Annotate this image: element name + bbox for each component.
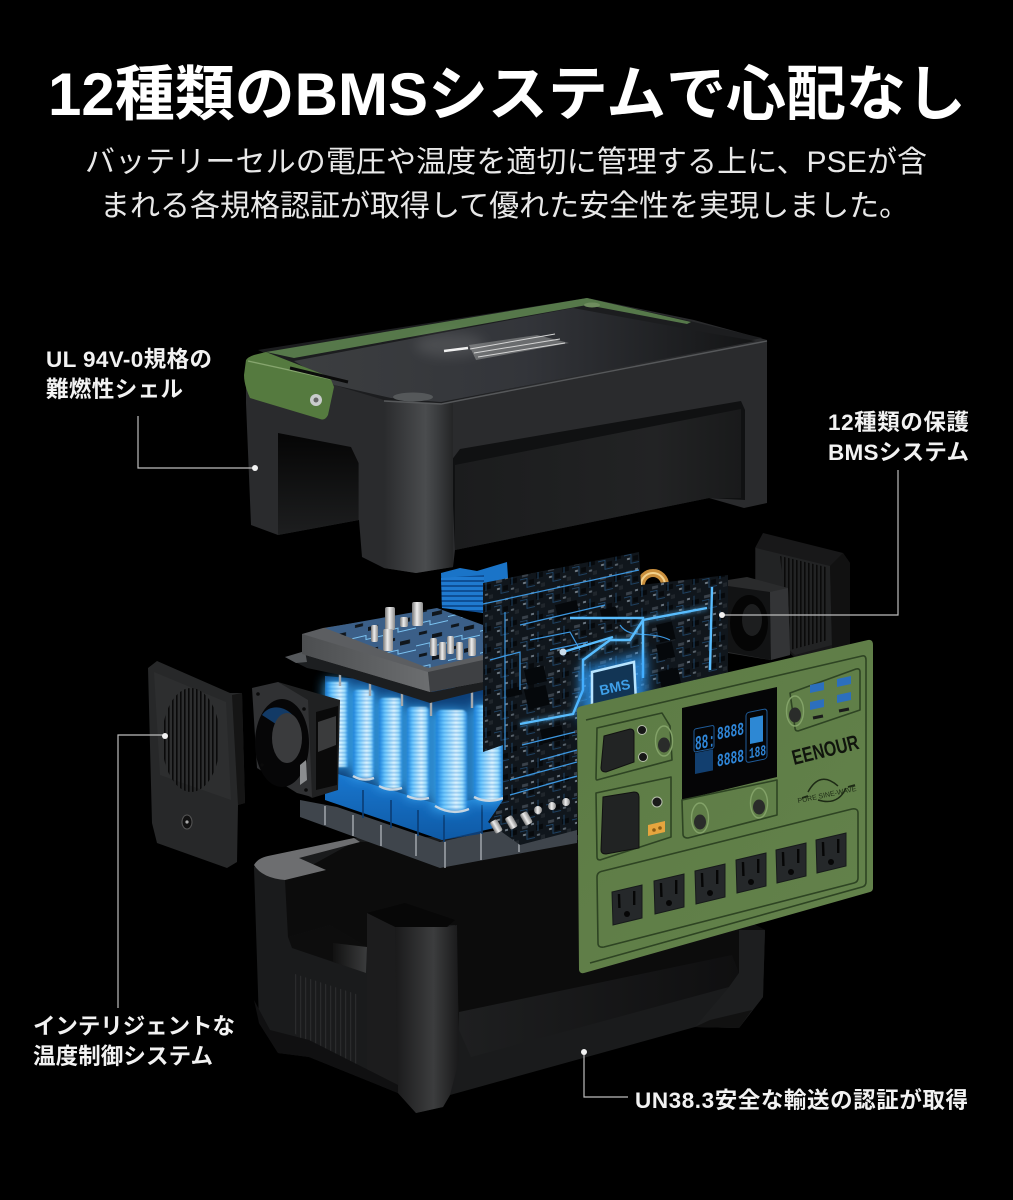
illustration: battery cells xyxy=(325,672,503,842)
panel: lower left socket group xyxy=(596,777,671,860)
callout: flame-retardant shell: 難燃性シェル xyxy=(46,377,183,402)
illustration: left fan xyxy=(252,682,340,798)
illustration: toroid coil xyxy=(641,573,665,597)
callout: temperature control xyxy=(33,733,235,1069)
illustration: main circuit board xyxy=(483,552,728,845)
illustration: lower shell xyxy=(254,835,765,1113)
illustration: BMS chip: BMS xyxy=(598,676,632,698)
callout: UN38.3: UN38.3安全な輸送の認証が取得 xyxy=(635,1087,968,1113)
panel: USB group xyxy=(786,669,860,731)
callout: temperature control: インテリジェントな xyxy=(33,1014,235,1039)
callout: flame-retardant shell xyxy=(46,347,258,471)
panel: upper left socket group xyxy=(596,713,672,780)
callout: BMS protection xyxy=(719,410,969,618)
illustration: right vent cover xyxy=(755,533,850,658)
panel: pure sine wave mark: PURE SINE-WAVE xyxy=(797,786,857,805)
subtitle text block: バッテリーセルの電圧や温度を適切に管理する上に、PSEが含 xyxy=(85,146,927,179)
illustration: battery top slab and small circuit board xyxy=(285,602,483,703)
panel: LCD display xyxy=(682,687,777,800)
illustration: BMS chip xyxy=(580,652,648,722)
illustration: right fan xyxy=(728,577,790,660)
callout: temperature control: 温度制御システム xyxy=(33,1044,213,1069)
callout: BMS protection: 12種類の保護 xyxy=(828,410,969,435)
callout: BMS protection: BMSシステム xyxy=(828,440,969,465)
panel: brand logo: EENOUR xyxy=(790,731,861,770)
callout: flame-retardant shell: UL 94V-0規格の xyxy=(46,347,212,372)
panel: LCD display: 188 xyxy=(749,742,766,763)
panel: LCD display: 8888 xyxy=(717,720,744,746)
front panel xyxy=(577,640,873,973)
subtitle text block: まれる各規格認証が取得して優れた安全性を実現しました。 xyxy=(100,190,909,223)
subtitle text block xyxy=(85,146,927,223)
panel: AC outlets xyxy=(597,809,858,947)
panel: LCD display: 8888 xyxy=(717,747,744,773)
illustration: battery base xyxy=(300,800,577,868)
illustration: upper shell xyxy=(244,298,767,573)
panel: mode buttons xyxy=(682,780,777,838)
title: 12種類のBMSシステムで心配なし xyxy=(48,61,966,128)
illustration: heat sink xyxy=(441,562,510,613)
illustration: left vent cover xyxy=(148,661,245,868)
callout: UN38.3 xyxy=(581,1049,968,1113)
panel: LCD display: 88: xyxy=(695,730,715,757)
